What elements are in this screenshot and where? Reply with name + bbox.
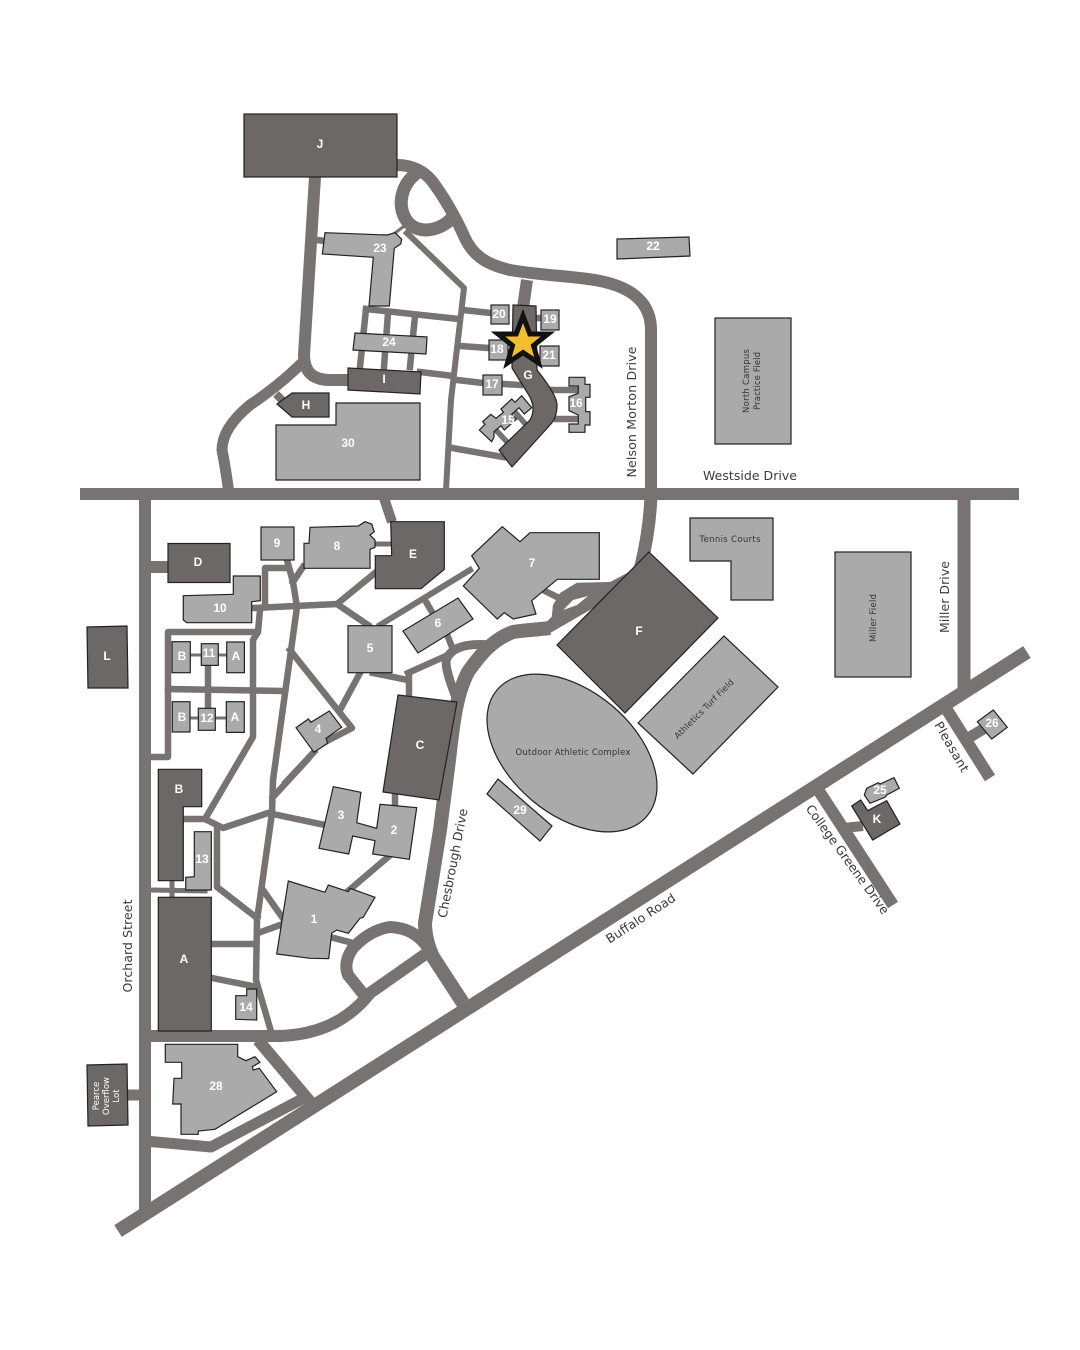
building K: K	[873, 812, 882, 826]
building E: E	[409, 547, 417, 561]
building J	[244, 114, 397, 177]
building 8	[304, 522, 375, 568]
building 9: 9	[274, 536, 281, 550]
building 11 B	[172, 642, 190, 673]
building 13: 13	[195, 852, 209, 866]
building 26: 26	[985, 716, 999, 730]
building I	[348, 368, 421, 394]
building 14	[236, 989, 257, 1020]
building L: L	[103, 649, 111, 663]
building 28	[165, 1044, 277, 1134]
building 22	[617, 237, 690, 259]
tennis courts: Tennis Courts	[698, 535, 761, 545]
building 5	[348, 626, 392, 673]
miller field	[835, 552, 911, 677]
building 10	[183, 576, 260, 623]
building F: F	[635, 624, 643, 638]
building 11 B: B	[178, 649, 187, 663]
campus paths	[152, 227, 578, 1028]
building 25: 25	[873, 783, 887, 797]
building 1	[277, 881, 375, 959]
athletics turf field: Athletics Turf Field	[673, 678, 736, 741]
building 12 A: A	[231, 710, 240, 724]
pearce overflow lot	[87, 1064, 128, 1126]
building 11 A: A	[232, 649, 241, 663]
building 19: 19	[543, 312, 557, 326]
building B	[158, 769, 202, 881]
building 12 A	[226, 702, 244, 732]
building A: A	[180, 952, 189, 966]
tennis courts	[690, 518, 773, 600]
building 26	[977, 710, 1007, 739]
building 13	[186, 832, 211, 890]
outdoor athletic complex: Outdoor Athletic Complex	[516, 748, 630, 758]
building 24: 24	[382, 335, 396, 349]
building 24	[353, 333, 427, 354]
label: Nelson Morton Drive: Nelson Morton Drive	[624, 346, 639, 478]
building 19	[541, 310, 559, 330]
label: Westside Drive: Westside Drive	[703, 468, 797, 483]
building 9	[261, 527, 294, 560]
building 18: 18	[490, 342, 504, 356]
building 11 A	[227, 642, 244, 673]
building 4	[296, 711, 342, 752]
buildings 3 and 2: 2	[391, 823, 398, 837]
icon: location star	[498, 316, 548, 363]
building C	[383, 695, 457, 800]
label: Buffalo Road: Buffalo Road	[603, 890, 678, 946]
building H	[277, 393, 329, 417]
label: Pleasant: Pleasant	[931, 719, 972, 775]
building A	[158, 897, 211, 1031]
pearce overflow lot: Lot	[112, 1089, 122, 1103]
street labels	[120, 346, 972, 992]
road junction at building F	[547, 570, 650, 635]
outdoor athletic complex	[457, 643, 687, 863]
building 4: 4	[315, 722, 322, 736]
label: College Greene Drive: College Greene Drive	[803, 802, 893, 917]
building 30: 30	[341, 436, 355, 450]
building D	[168, 544, 230, 582]
north campus practice field	[715, 318, 791, 444]
building 23	[322, 233, 402, 306]
building 5: 5	[367, 641, 374, 655]
building 11: 11	[203, 646, 216, 660]
building 12: 12	[200, 711, 214, 725]
building 15: 15	[501, 413, 515, 427]
building K	[852, 800, 900, 840]
building 18	[489, 340, 508, 360]
building 8: 8	[334, 539, 341, 553]
building 29: 29	[513, 803, 527, 817]
north campus practice field: North Campus	[742, 348, 752, 413]
pearce overflow lot: Overflow	[102, 1077, 112, 1115]
building 30	[276, 403, 420, 480]
pearce overflow lot: Pearce	[92, 1082, 102, 1110]
building F	[557, 552, 718, 713]
building 16	[569, 377, 590, 432]
building G	[499, 305, 557, 467]
building 22: 22	[646, 239, 660, 253]
building E	[375, 522, 444, 589]
building 12	[198, 708, 215, 730]
building 7: 7	[529, 556, 536, 570]
buildings 3 and 2	[319, 787, 417, 859]
label: Chesbrough Drive: Chesbrough Drive	[435, 807, 471, 919]
building 7	[463, 527, 599, 619]
building 14: 14	[239, 1000, 253, 1014]
label: Orchard Street: Orchard Street	[120, 899, 135, 992]
building L	[87, 626, 128, 688]
building 20: 20	[492, 307, 506, 321]
road network	[80, 165, 1027, 1231]
building G: G	[523, 368, 533, 382]
main roads	[80, 165, 1027, 1231]
building 29	[487, 779, 552, 841]
building 1: 1	[311, 912, 318, 926]
building 12 B	[172, 702, 190, 732]
building 15	[479, 396, 532, 442]
building D: D	[194, 555, 203, 569]
building 12 B: B	[178, 710, 187, 724]
athletics turf field	[638, 636, 778, 774]
building 28: 28	[209, 1079, 223, 1093]
building 17: 17	[485, 377, 499, 391]
building 20	[491, 305, 509, 324]
building 11	[201, 644, 218, 665]
north campus practice field: Practice Field	[753, 352, 763, 410]
building 10: 10	[213, 601, 227, 615]
building I: I	[382, 372, 386, 386]
buildings, north campus	[244, 114, 791, 480]
building 17	[483, 375, 502, 395]
building 16: 16	[569, 396, 583, 410]
building C: C	[416, 738, 425, 752]
building 6	[403, 598, 473, 653]
building 21	[540, 346, 559, 366]
building J: J	[317, 137, 323, 151]
label: Miller Drive: Miller Drive	[937, 561, 952, 633]
building H: H	[302, 398, 310, 412]
building B: B	[175, 782, 184, 796]
building 6: 6	[435, 616, 442, 630]
building 25	[864, 778, 899, 803]
building 21: 21	[542, 348, 556, 362]
buildings 3 and 2: 3	[338, 808, 345, 822]
buildings, south campus	[87, 518, 1007, 1134]
building 23: 23	[373, 241, 387, 255]
miller field: Miller Field	[869, 594, 879, 642]
